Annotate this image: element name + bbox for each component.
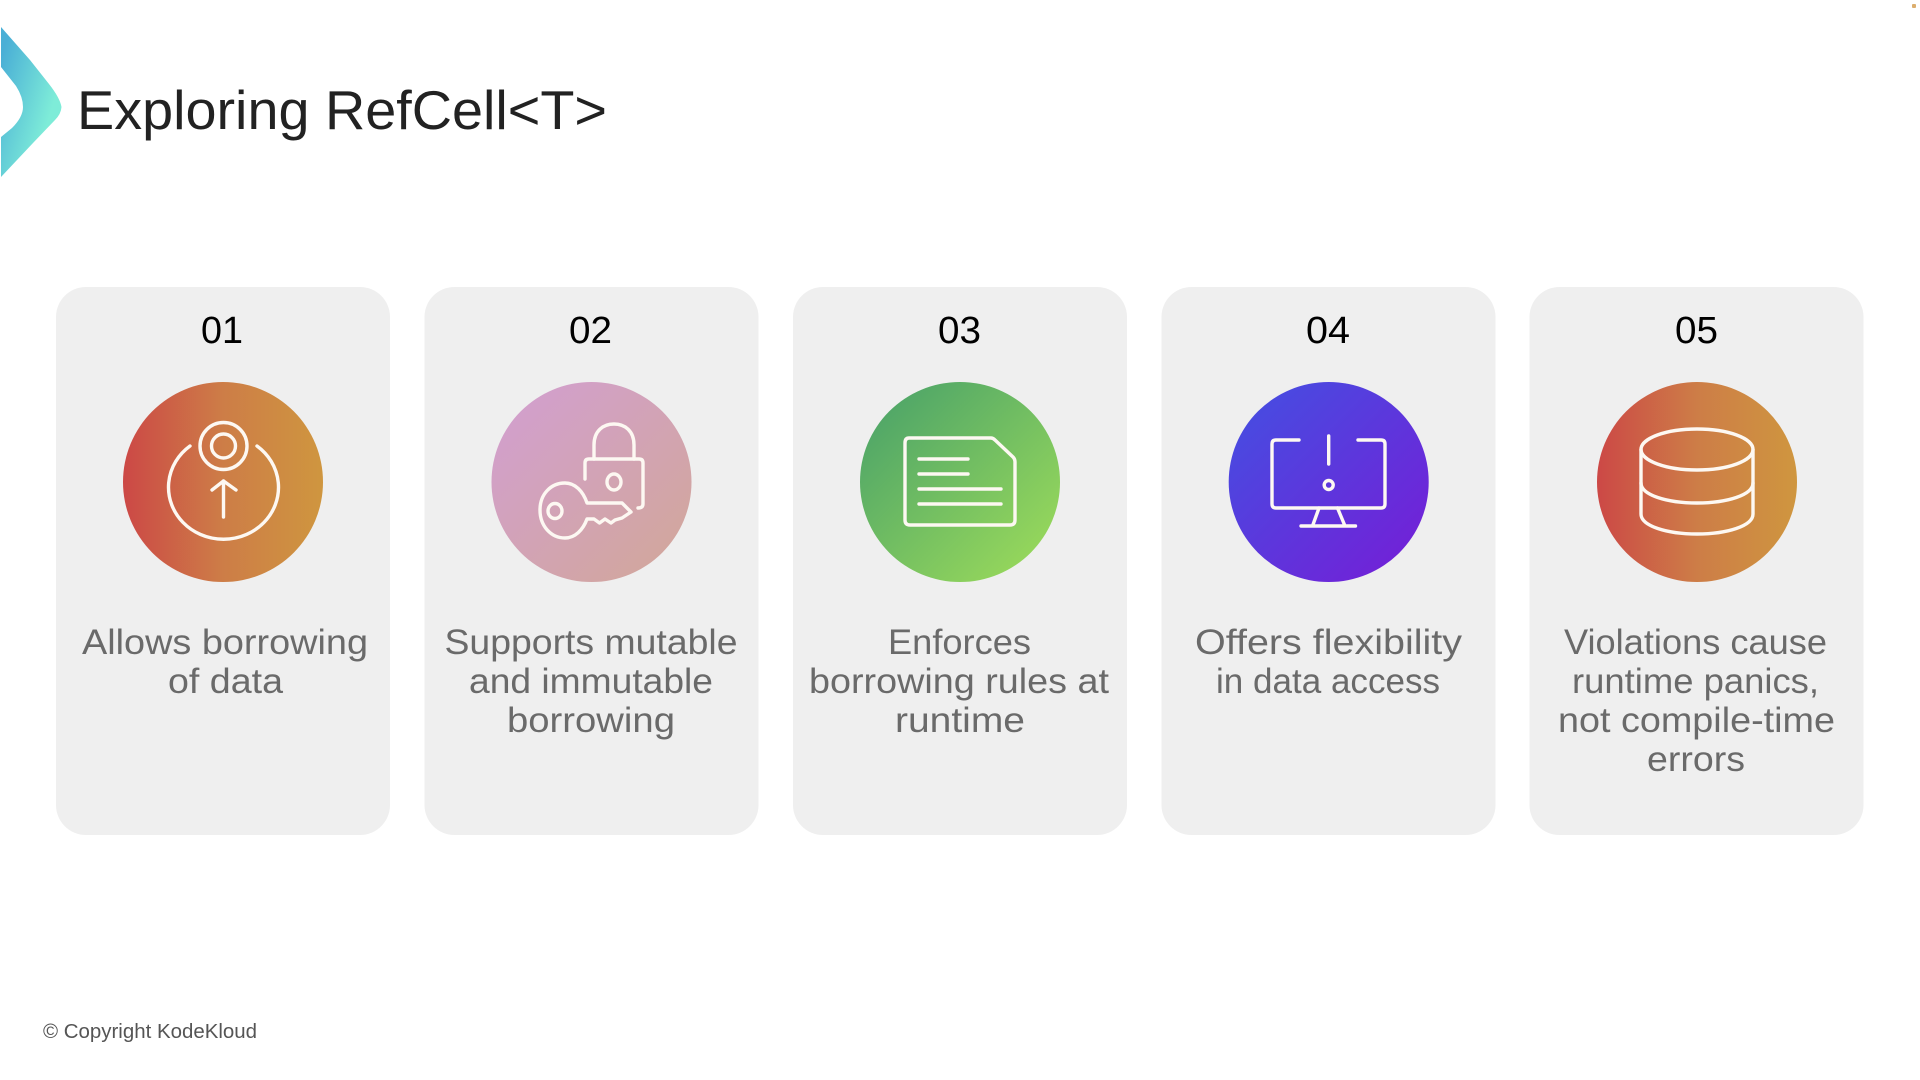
- text: violations cause panics: Violations cause: [1564, 623, 1827, 662]
- text: supports mutable: Supports mutable: [444, 623, 738, 662]
- number 05: 05: [1675, 310, 1718, 352]
- icon: title chevron: [1, 27, 62, 177]
- title: Exploring RefCell<T>: [77, 79, 607, 141]
- number 02: 02: [569, 310, 612, 352]
- text: allows borrowing: [82, 623, 368, 701]
- text: violations cause panics: errors: [1647, 740, 1745, 779]
- text: violations cause panics: [1558, 623, 1835, 779]
- icon: circle with arrow up: [123, 382, 323, 582]
- footer copyright: © Copyright KodeKloud: [43, 1021, 257, 1043]
- panel: card 02: [424, 287, 758, 835]
- text: offers flexibility: [1195, 623, 1463, 701]
- text: enforces borrowing rules: borrowing rules at: [809, 662, 1109, 701]
- icon: monitor with alert: [1229, 382, 1429, 582]
- panel: card 04: [1162, 287, 1496, 835]
- text: allows borrowing: of data: [168, 662, 284, 701]
- icon: database: [1597, 382, 1797, 582]
- text: enforces borrowing rules: runtime: [895, 701, 1025, 740]
- icon: document: [860, 382, 1060, 582]
- text: violations cause panics: runtime panics,: [1572, 662, 1819, 701]
- panel: card 03: [793, 287, 1127, 835]
- panel: card 01: [56, 287, 390, 835]
- panel: card 05: [1530, 287, 1864, 835]
- number 01: 01: [201, 310, 243, 352]
- number 04: 04: [1306, 310, 1350, 352]
- text: offers flexibility: Offers flexibility: [1195, 623, 1463, 662]
- text: enforces borrowing rules: [809, 623, 1109, 740]
- text: supports mutable: and immutable: [469, 662, 713, 701]
- text: offers flexibility: in data access: [1216, 662, 1440, 701]
- number 03: 03: [938, 310, 981, 352]
- text: enforces borrowing rules: Enforces: [888, 623, 1031, 662]
- text: supports mutable: [444, 623, 738, 740]
- icon: lock and key: [492, 382, 692, 582]
- text: supports mutable: borrowing: [507, 701, 675, 740]
- text: allows borrowing: Allows borrowing: [82, 623, 368, 662]
- text: violations cause panics: not compile-time: [1558, 701, 1835, 740]
